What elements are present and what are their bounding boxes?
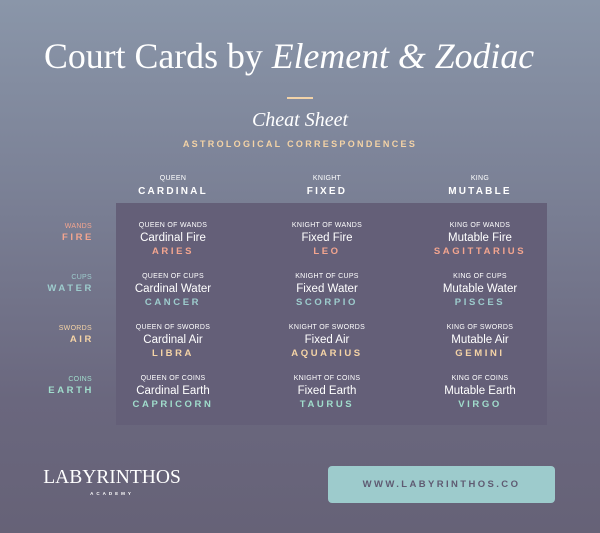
panel: card table: Cardinal Water — [135, 283, 211, 295]
panel: card table — [116, 203, 547, 425]
row labels: FIRE — [62, 232, 94, 243]
panel: card table: Cardinal Fire — [140, 232, 206, 244]
row labels: CUPS — [71, 274, 92, 281]
panel: card table: KING OF COINS — [452, 375, 508, 382]
website button: WWW.LABYRINTHOS.CO — [363, 479, 520, 490]
title: Court Cards by Element & Zodiac — [44, 36, 534, 76]
logo: LABYRINTHOS — [43, 467, 181, 488]
panel: card table: SCORPIO — [296, 297, 358, 308]
row labels — [47, 223, 94, 396]
panel: card table: QUEEN OF COINS — [141, 375, 205, 382]
column headers: FIXED — [307, 186, 347, 197]
row labels: EARTH — [48, 385, 94, 396]
panel: card table: KNIGHT OF SWORDS — [289, 324, 365, 331]
panel: card table: KNIGHT OF CUPS — [295, 273, 359, 280]
panel: card table: Fixed Air — [305, 334, 349, 346]
panel: card table: Mutable Fire — [448, 232, 512, 244]
divider accent — [287, 97, 313, 99]
panel: card table: LEO — [313, 246, 341, 257]
panel: card table: KING OF WANDS — [450, 222, 510, 229]
panel: card table: AQUARIUS — [291, 348, 363, 359]
panel: card table: LIBRA — [152, 348, 194, 359]
panel: card table: Fixed Water — [296, 283, 358, 295]
panel: card table: KNIGHT OF COINS — [294, 375, 360, 382]
row labels: AIR — [70, 334, 94, 345]
panel: card table: QUEEN OF CUPS — [142, 273, 204, 280]
panel: card table: Cardinal Air — [143, 334, 203, 346]
panel: card table: KING OF SWORDS — [447, 324, 513, 331]
panel: card table: GEMINI — [455, 348, 505, 359]
column headers: KNIGHT — [313, 175, 341, 182]
column headers: KING — [471, 175, 489, 182]
panel: card table: CAPRICORN — [133, 399, 213, 410]
panel: card table: QUEEN OF SWORDS — [136, 324, 210, 331]
column headers — [138, 175, 512, 197]
panel: card table: CANCER — [145, 297, 201, 308]
panel: card table: Fixed Earth — [298, 385, 356, 397]
logo: ACADEMY — [90, 491, 134, 496]
panel: card table: PISCES — [455, 297, 505, 308]
column headers: QUEEN — [160, 175, 186, 182]
row labels: COINS — [68, 376, 92, 383]
panel: card table: Mutable Water — [443, 283, 517, 295]
panel: card table: TAURUS — [300, 399, 354, 410]
panel: card table: KING OF CUPS — [453, 273, 507, 280]
panel: card table: Fixed Fire — [301, 232, 353, 244]
panel: card table: QUEEN OF WANDS — [139, 222, 207, 229]
row labels: WANDS — [65, 223, 92, 230]
panel: card table: ARIES — [152, 246, 194, 257]
panel: card table: Mutable Earth — [444, 385, 516, 397]
column headers: CARDINAL — [138, 186, 208, 197]
panel: card table: KNIGHT OF WANDS — [292, 222, 362, 229]
panel: card table: Cardinal Earth — [136, 385, 210, 397]
panel: card table: Mutable Air — [451, 334, 509, 346]
row labels: SWORDS — [59, 325, 92, 332]
subheading: ASTROLOGICAL CORRESPONDENCES — [183, 139, 417, 149]
row labels: WATER — [47, 283, 94, 294]
website button — [328, 466, 555, 503]
panel: card table: VIRGO — [458, 399, 502, 410]
column headers: MUTABLE — [448, 186, 512, 197]
panel: card table: SAGITTARIUS — [434, 246, 526, 257]
subtitle: Cheat Sheet — [252, 109, 348, 131]
